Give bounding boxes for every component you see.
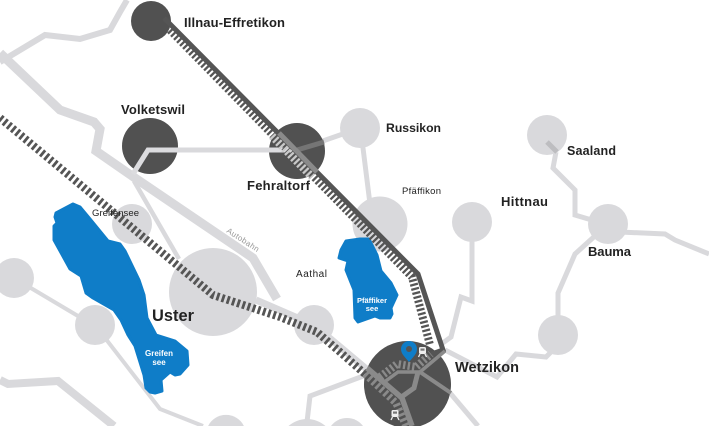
- label: Wetzikon: Wetzikon: [455, 360, 519, 376]
- town: Wetzikon: [364, 341, 451, 426]
- lake: Greifensee: [54, 204, 188, 393]
- label: Greifensee lake: see: [152, 358, 166, 367]
- town: Russikon: [340, 108, 380, 148]
- label: Uster: Uster: [152, 307, 195, 325]
- town: Pfäffikon: [352, 196, 408, 252]
- label: Illnau-Effretikon: Illnau-Effretikon: [184, 15, 285, 30]
- Wetzikon rail and road lines: [365, 351, 451, 426]
- label: Aathal: Aathal: [296, 269, 327, 280]
- town: bottom 3: [331, 418, 363, 426]
- town: Hittnau: [452, 202, 492, 242]
- Saaland road stub: [547, 142, 557, 152]
- label: Fehraltorf: Fehraltorf: [247, 178, 311, 193]
- icon: train station south: [391, 410, 399, 420]
- town: Volketswil: [122, 118, 178, 174]
- label: Greifensee lake: Greifen: [145, 349, 173, 358]
- icon: train station Wetzikon: [418, 347, 426, 357]
- town: Greifensee: [112, 204, 152, 244]
- town: Uster: [169, 248, 257, 336]
- town: south of Bauma: [538, 315, 578, 355]
- town: west of Greifensee lake: [75, 305, 115, 345]
- label: Pfäffikersee lake: see: [366, 304, 378, 313]
- icon: location pin: [401, 341, 417, 362]
- label: Pfäffikon: Pfäffikon: [402, 186, 441, 197]
- town: bottom 1: [208, 415, 244, 426]
- town: Bauma: [588, 204, 628, 244]
- label: Pfäffikersee lake: Pfäffiker: [357, 296, 387, 305]
- label: Hittnau: Hittnau: [501, 194, 548, 209]
- label: Greifensee: Greifensee: [92, 208, 139, 219]
- town: Fehraltorf: [269, 123, 325, 179]
- railway: Uster to Wetzikon: [0, 118, 365, 374]
- town: Saaland: [527, 115, 567, 155]
- railway: Illnau to Wetzikon: [164, 18, 443, 355]
- town: Illnau-Effretikon: [131, 1, 171, 41]
- label: Russikon: Russikon: [386, 121, 441, 135]
- label: Autobahn: Autobahn: [225, 226, 261, 254]
- town: Aathal: [294, 305, 334, 345]
- lake: Pfäffikersee: [339, 239, 397, 322]
- rail hatch inside Fehraltorf: [272, 136, 312, 177]
- label: Bauma: Bauma: [588, 244, 632, 259]
- label: Volketswil: Volketswil: [121, 102, 185, 117]
- rail overlay inside Fehraltorf: [279, 133, 317, 172]
- town: left edge: [0, 258, 34, 298]
- town: bottom 2: [288, 419, 326, 426]
- label: Saaland: Saaland: [567, 144, 616, 158]
